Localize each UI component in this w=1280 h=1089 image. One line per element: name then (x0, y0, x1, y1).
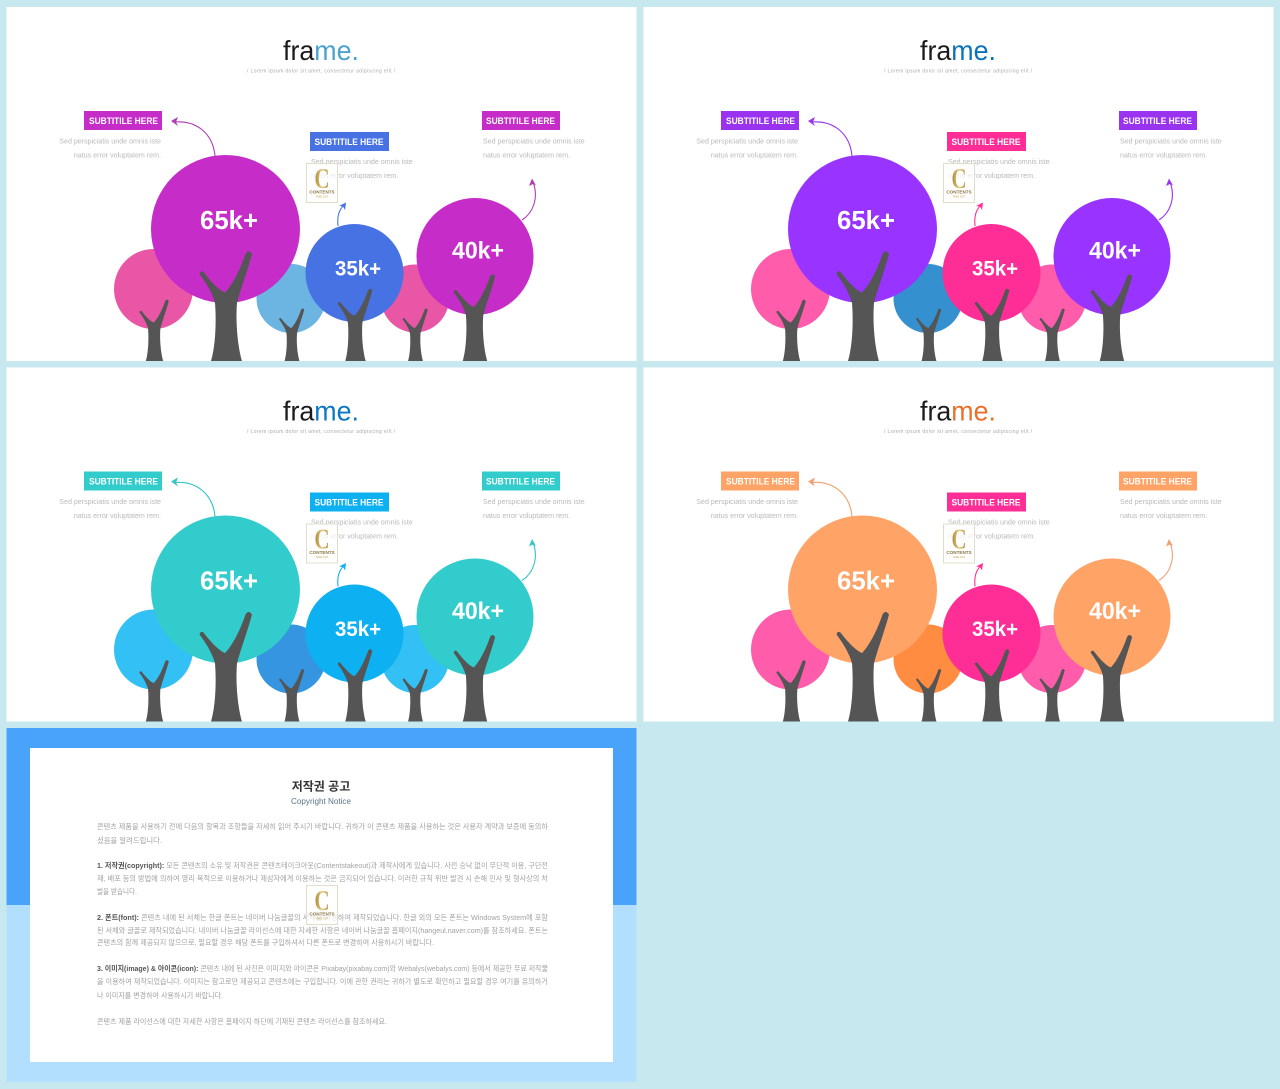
section 3 image and icon (97, 963, 548, 1000)
section 2 font: 2. 폰트(font): 콘텐츠 내에 된 서체는 한글 폰트는 네이버 나눔글꼴의 서체를 사용하여 제작되었습니다. 한글 외의 모든 폰트는 Windows System에 포함 (97, 912, 548, 922)
title: frame. (283, 396, 359, 426)
body text right (483, 498, 585, 520)
tree: 40k+ (416, 198, 534, 361)
tagline: / Lorem ipsum dolor sit amet, consectetur adipiscing elit / (884, 429, 1033, 435)
watermark: C (952, 163, 966, 195)
arrow middle (975, 202, 983, 226)
watermark: CONTENTS (309, 550, 335, 555)
tree: small right (1018, 264, 1086, 361)
body text right: Sed perspiciatis unde omnis iste (483, 498, 585, 506)
arrow right (522, 539, 536, 580)
body text left: natus error voluptatem rem. (74, 512, 161, 520)
subtitle label middle: SUBTITILE HERE (314, 498, 384, 508)
tree: small left (751, 610, 830, 722)
title: frame. (920, 396, 996, 426)
title: frame. (920, 35, 996, 66)
body text right (483, 138, 585, 160)
tree: 35k+ (942, 224, 1040, 361)
subtitle label left: SUBTITILE HERE (89, 116, 158, 126)
body text left (59, 138, 161, 160)
arrow right (1159, 539, 1173, 580)
section 1 copyright: 벌을 받습니다. (97, 886, 137, 896)
body text left: Sed perspiciatis unde omnis iste (696, 498, 798, 506)
body text right (1120, 498, 1222, 520)
arrow middle (338, 202, 346, 226)
watermark (306, 885, 338, 924)
body text left: natus error voluptatem rem. (74, 152, 161, 160)
arrow right (522, 178, 536, 220)
body text right: Sed perspiciatis unde omnis iste (1120, 498, 1222, 506)
subtitle label right (482, 111, 560, 130)
tree: 40k+: 40k+ (1089, 598, 1141, 625)
tagline: / Lorem ipsum dolor sit amet, consectetur adipiscing elit / (247, 429, 396, 435)
watermark: CONTENTS (309, 190, 335, 194)
body text left: Sed perspiciatis unde omnis iste (59, 138, 161, 146)
section 2 font: 콘텐츠의 함께 제공되지 않으므로, 필요할 경우 해당 폰트를 구입하셔서 다른 폰트로 변경하여 사용하시기 바랍니다. (97, 937, 434, 947)
arrow left (808, 117, 852, 156)
body text middle: Sed perspiciatis unde omnis iste (311, 158, 413, 166)
tree: 35k+ (306, 584, 404, 722)
body text right: Sed perspiciatis unde omnis iste (1120, 138, 1222, 146)
subtitle label left (721, 472, 799, 490)
subtitle label middle (310, 132, 389, 151)
section 1 copyright: 1. 저작권(copyright): 모든 콘텐츠의 소유 및 저작권은 콘텐츠테이크아웃(Contentstakeout)과 제작사에게 있습니다. 사전 승낙 없이 무단적 이용, 구단전 (97, 860, 548, 870)
notice subheading: Copyright Notice (291, 796, 351, 806)
tree: 40k+: 40k+ (452, 238, 504, 264)
arrow left (171, 117, 215, 156)
subtitle label right (1119, 472, 1197, 490)
watermark: C (314, 885, 330, 917)
arrow middle (338, 563, 346, 586)
tree: small left (114, 610, 193, 722)
body text right: Sed perspiciatis unde omnis iste (483, 138, 585, 146)
tree: 65k+: 65k+ (837, 205, 895, 235)
watermark: CONTENTS (946, 190, 972, 194)
tree: small centre (894, 624, 962, 722)
panel: orange variant (644, 368, 1274, 722)
tree: small left (751, 249, 830, 361)
tree: small centre (256, 264, 326, 361)
tree: 35k+: 35k+ (335, 618, 381, 641)
subtitle label middle (310, 492, 389, 512)
tree: 40k+ (416, 558, 534, 722)
subtitle label right: SUBTITILE HERE (486, 476, 555, 486)
body text middle: Sed perspiciatis unde omnis iste (311, 518, 413, 526)
subtitle label middle: SUBTITILE HERE (952, 498, 1020, 508)
body text left: natus error voluptatem rem. (711, 152, 798, 160)
subtitle label middle (947, 492, 1026, 512)
body text middle: Sed perspiciatis unde omnis iste (948, 518, 1050, 526)
body text right: natus error voluptatem rem. (1120, 152, 1207, 160)
panel: teal variant (6, 368, 636, 722)
intro paragraph: 셨음을 알려드립니다. (97, 835, 162, 845)
panel: copyright notice (6, 728, 636, 1082)
section 2 font: 된 서체와 글꼴로 제작되었습니다. 네이버 나눔글꼴 라이선스에 대한 자세한 사항은 네이버 나눔글꼴 홈페이지(hangeul.naver.com)를 참조하세요. 폰트는 (97, 925, 548, 935)
tree: small centre (894, 264, 962, 361)
body text middle (311, 158, 413, 180)
tree: small right (1018, 625, 1086, 722)
tree: 40k+: 40k+ (452, 598, 504, 625)
intro paragraph (97, 821, 548, 845)
subtitle label right: SUBTITILE HERE (1123, 116, 1192, 126)
subtitle label right: SUBTITILE HERE (486, 116, 555, 126)
tree: small centre (256, 624, 326, 722)
tree: 65k+: 65k+ (200, 205, 258, 235)
subtitle label right (1119, 111, 1197, 130)
section 2 font (97, 912, 548, 947)
tree: 35k+ (942, 584, 1040, 722)
watermark (306, 163, 338, 202)
watermark: CONTENTS (309, 912, 335, 916)
tree: 40k+: 40k+ (1089, 238, 1141, 264)
body text left (696, 498, 798, 520)
watermark: TAKE OUT (953, 194, 966, 198)
body text middle (948, 158, 1050, 180)
tree: 65k+ (788, 155, 937, 361)
subtitle label left: SUBTITILE HERE (726, 476, 795, 486)
watermark: TAKE OUT (316, 555, 329, 559)
watermark: TAKE OUT (316, 916, 329, 920)
body text middle: Sed perspiciatis unde omnis iste (948, 158, 1050, 166)
watermark: CONTENTS (946, 550, 972, 555)
body text right: natus error voluptatem rem. (483, 512, 570, 520)
subtitle label left (84, 472, 162, 490)
panel: purple variant (6, 7, 636, 361)
tree: 65k+ (788, 516, 937, 722)
watermark (306, 524, 338, 563)
tagline: / Lorem ipsum dolor sit amet, consectetur adipiscing elit / (247, 68, 396, 74)
body text left: natus error voluptatem rem. (711, 512, 798, 520)
body text left (59, 498, 161, 520)
tagline: / Lorem ipsum dolor sit amet, consectetur adipiscing elit / (884, 68, 1033, 74)
subtitle label left (84, 111, 162, 130)
title: frame. (283, 35, 359, 66)
section 1 copyright (97, 860, 548, 896)
intro paragraph: 콘텐츠 제품을 사용하기 전에 다음의 항목과 조항들을 자세히 읽어 주시기 바랍니다. 귀하가 이 콘텐츠 제품을 사용하는 것은 사용자 계약과 보증에 동의하 (97, 821, 548, 831)
subtitle label middle (947, 132, 1026, 151)
watermark (944, 163, 974, 202)
body text middle (948, 518, 1050, 540)
body text middle: natus error voluptatem rem. (311, 172, 398, 180)
panel: violet variant (644, 7, 1274, 361)
arrow left (171, 478, 215, 516)
body text middle (311, 518, 413, 540)
watermark (944, 524, 974, 563)
body text left: Sed perspiciatis unde omnis iste (59, 498, 161, 506)
body text left (696, 138, 798, 160)
tree: small right (381, 264, 449, 361)
subtitle label right: SUBTITILE HERE (1123, 476, 1192, 486)
watermark: TAKE OUT (953, 555, 966, 559)
body text left: Sed perspiciatis unde omnis iste (696, 138, 798, 146)
body text middle: natus error voluptatem rem. (948, 532, 1035, 540)
body text middle: natus error voluptatem rem. (311, 532, 398, 540)
closing line: 콘텐츠 제품 라이선스에 대한 자세한 사항은 홈페이지 하단에 기재된 콘텐츠 라이선스를 참조하세요. (97, 1016, 387, 1026)
body text right (1120, 138, 1222, 160)
watermark: TAKE OUT (316, 194, 329, 198)
subtitle label left (721, 111, 799, 130)
arrow left (808, 478, 852, 516)
body text middle: natus error voluptatem rem. (948, 172, 1035, 180)
tree: small right (381, 625, 449, 722)
notice heading: 저작권 공고 (292, 778, 350, 794)
subtitle label middle: SUBTITILE HERE (952, 137, 1020, 147)
tree: 65k+: 65k+ (200, 566, 258, 596)
tree: 40k+ (1054, 558, 1170, 722)
section 3 image and icon: 3. 이미지(image) & 아이콘(icon): 콘텐츠 내에 된 사진은 이미지와 아이콘은 Pixabay(pixabay.com)와 Webalys(webalys.com) 등에서 제공한 무료 저작물 (97, 963, 548, 973)
tree: small left (114, 249, 193, 361)
watermark: C (314, 163, 330, 195)
tree: 35k+: 35k+ (972, 258, 1018, 280)
section 3 image and icon: 을 이용하여 제작되었습니다. 이미지는 참고로만 제공되고 콘텐츠에는 구입합니다. 이에 관한 권리는 귀하가 별도로 확인하고 필요할 경우 여기를 유의하거 (97, 976, 548, 986)
tree: 35k+ (306, 224, 404, 361)
tree: 65k+ (151, 155, 300, 361)
tree: 35k+: 35k+ (972, 618, 1018, 641)
body text right: natus error voluptatem rem. (1120, 512, 1207, 520)
section 3 image and icon: 나 이미지를 변경하여 사용하시기 바랍니다. (97, 990, 223, 1000)
arrow middle (975, 563, 983, 586)
subtitle label left: SUBTITILE HERE (726, 116, 795, 126)
watermark: C (952, 524, 966, 556)
body text right: natus error voluptatem rem. (483, 152, 570, 160)
tree: 40k+ (1054, 198, 1170, 361)
tree: 65k+: 65k+ (837, 566, 895, 596)
subtitle label middle: SUBTITILE HERE (314, 137, 384, 147)
subtitle label left: SUBTITILE HERE (89, 476, 158, 486)
tree: 35k+: 35k+ (335, 258, 381, 280)
tree: 65k+ (151, 516, 300, 722)
watermark: C (314, 524, 330, 556)
subtitle label right (482, 472, 560, 490)
arrow right (1159, 178, 1173, 220)
section 1 copyright: 재, 배포 등의 방법에 의하여 영리 목적으로 이용하거나 제삼자에게 이용하는 것은 금지되어 있습니다. 이러한 규칙 위반 발견 시 손해 민사 및 형사상의 처 (97, 873, 548, 883)
